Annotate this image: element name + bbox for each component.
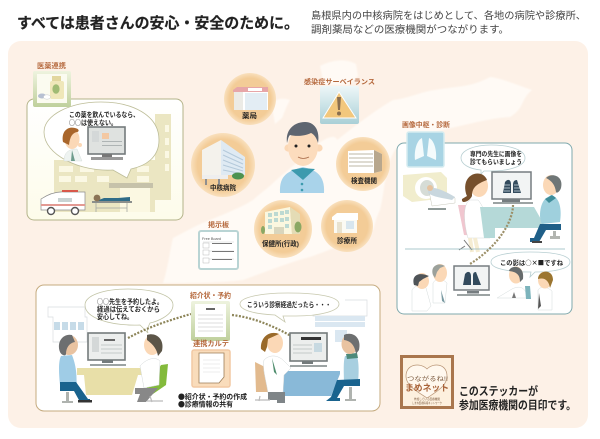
bubble text bbox=[69, 109, 139, 127]
sticker text bbox=[405, 375, 449, 405]
bubble text: この薬を飲んでいるなら、 bbox=[69, 109, 139, 119]
divider bbox=[405, 248, 565, 250]
panel: referral and reservation bbox=[36, 285, 380, 411]
dotted links bbox=[128, 314, 291, 338]
patient figure bbox=[280, 122, 324, 193]
speech bubble: left bbox=[85, 289, 173, 333]
hospital building bbox=[54, 114, 171, 212]
bubble text: left: ○○先生を予約したよ。 bbox=[97, 296, 163, 306]
card: infection surveillance: 感染症サーベイランス bbox=[304, 77, 375, 86]
sticker text: しまね医療情報ネットワーク bbox=[412, 401, 442, 405]
label: 薬局 bbox=[242, 111, 257, 120]
hospital backdrop right bbox=[313, 300, 367, 342]
facility: pharmacy bbox=[224, 73, 276, 125]
card: notice board bbox=[199, 220, 238, 269]
doctor: right bbox=[255, 333, 291, 403]
nurse bbox=[458, 173, 490, 252]
subtitle: 島根県内の中核病院をはじめとして、各地の病院や診療所、 bbox=[311, 9, 586, 22]
monitor: X-ray bottom bbox=[454, 266, 490, 296]
bubble text: left bbox=[97, 296, 163, 321]
bubble text: top: 診てもらいましょう bbox=[470, 157, 522, 166]
CT scanner bbox=[403, 172, 455, 210]
heart outline bbox=[406, 365, 447, 398]
monitor: X-ray top bbox=[492, 172, 533, 204]
label: 中核病院 bbox=[210, 183, 236, 192]
sticker text: まめネット bbox=[405, 383, 449, 393]
patient: right panel bbox=[530, 175, 561, 243]
clinic backdrop left bbox=[48, 307, 87, 342]
facility: laboratory bbox=[336, 137, 390, 191]
doctor: left bbox=[135, 334, 168, 402]
card: notice board: 掲示板 bbox=[208, 220, 229, 229]
sticker caption: 参加医療機関の目印です。 bbox=[459, 398, 576, 412]
map of Shimane bbox=[163, 77, 532, 283]
desk: left bbox=[77, 368, 146, 395]
card: referral letter bbox=[190, 291, 231, 341]
speech bubble: right bbox=[240, 293, 339, 322]
bubble text: ○○は使えない。 bbox=[69, 117, 117, 127]
card: infection surveillance bbox=[304, 77, 375, 124]
sticker caption bbox=[459, 384, 576, 412]
patient: left bbox=[59, 335, 92, 403]
patient on stretcher bbox=[92, 195, 132, 212]
card: medicine cooperation bbox=[33, 61, 71, 107]
speech bubble: top bbox=[461, 145, 525, 174]
facility: public health office bbox=[254, 200, 312, 258]
card: image relay: 画像中枢・診断 bbox=[402, 120, 450, 129]
facility: core hospital bbox=[191, 133, 255, 197]
doctors: right pair bbox=[497, 266, 553, 310]
sticker text: つながるね!! bbox=[407, 375, 448, 383]
chart features text: ●診療情報の共有 bbox=[178, 400, 233, 410]
sticker caption: このステッカーが bbox=[459, 384, 538, 398]
sticker: Tsunagaru Mame-net bbox=[402, 356, 452, 408]
patient: right bbox=[326, 334, 360, 401]
label: 保健所(行政) bbox=[262, 239, 299, 248]
subtitle bbox=[311, 9, 586, 36]
bubble text: bottom: この影は○×■ですね bbox=[500, 257, 563, 267]
chart features text: ●紹介状・予約の作成 bbox=[178, 392, 247, 402]
bubble text: top: 専門の先生に画像を bbox=[470, 149, 522, 158]
doctor bbox=[63, 128, 82, 161]
panel: image relay and diagnosis bbox=[397, 143, 572, 314]
speech bubble: bottom bbox=[491, 252, 570, 277]
ambulance bbox=[41, 190, 85, 214]
panel: medical and pharmacy cooperation bbox=[27, 99, 183, 220]
doctors: left pair bbox=[412, 264, 447, 311]
desk: right bbox=[278, 371, 340, 396]
sticker text: 参加している医療機関 bbox=[414, 397, 440, 401]
dotted link bbox=[470, 205, 513, 264]
bubble text: left: 経過は伝えておくから bbox=[97, 304, 160, 314]
facility: clinic bbox=[321, 200, 373, 252]
desk bbox=[480, 207, 546, 238]
card: notice board: Free Board bbox=[202, 237, 221, 241]
label: 診療所 bbox=[337, 236, 357, 245]
monitor: right bbox=[290, 333, 327, 367]
islands bbox=[272, 60, 358, 124]
card: image relay bbox=[402, 120, 450, 167]
card: shared chart bbox=[192, 339, 230, 387]
card: referral letter: 紹介状・予約 bbox=[190, 291, 231, 300]
bubble text: right: こういう診察経過だったら・・・ bbox=[247, 300, 331, 309]
monitor: left bbox=[88, 333, 126, 366]
subtitle: 調剤薬局などの医療機関がつながります。 bbox=[311, 23, 509, 36]
speech bubble bbox=[44, 102, 159, 178]
card: medicine cooperation: 医薬連携 bbox=[37, 61, 66, 70]
chart features text bbox=[178, 392, 247, 410]
label: 検査機関 bbox=[351, 176, 377, 185]
bubble text: top bbox=[470, 149, 522, 166]
title: すべては患者さんの安心・安全のために。 bbox=[17, 14, 299, 32]
monitor bbox=[88, 127, 125, 160]
bubble text: left: 安心してね。 bbox=[97, 312, 133, 321]
card: shared chart: 連携カルテ bbox=[193, 339, 229, 348]
